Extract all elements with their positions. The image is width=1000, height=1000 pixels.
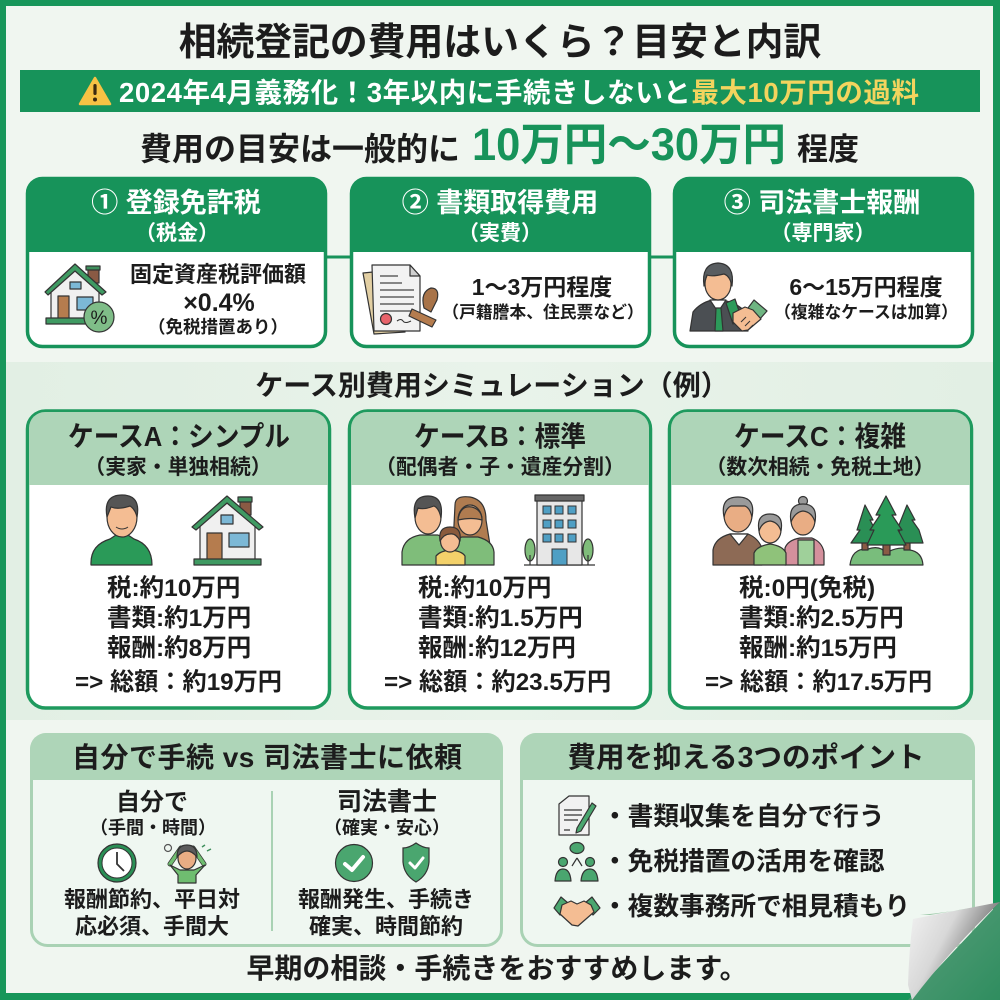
panel: case C	[670, 411, 972, 708]
panel: self vs scrivener	[30, 733, 503, 946]
cost estimate headline: 程度	[797, 132, 859, 167]
cost breakdown: 報酬:約15万円	[739, 634, 897, 662]
case subheading: （実家・単独相続）	[84, 456, 272, 479]
cost breakdown	[384, 574, 611, 696]
cost breakdown: 書類:約1万円	[107, 604, 251, 632]
card heading: ③ 司法書士報酬	[724, 188, 920, 218]
icon: house with percent: %	[91, 308, 108, 329]
tip text: ・複数事務所で相見積もり	[602, 892, 910, 921]
panel: case A	[28, 411, 330, 708]
section heading: case simulation: ケース別費用シミュレーション（例）	[255, 370, 729, 401]
column: scrivener: 確実、時間節約	[309, 914, 463, 939]
column: self: 自分で	[116, 789, 188, 816]
panel: case B	[350, 411, 650, 708]
icon: family house	[192, 496, 263, 565]
column: scrivener	[298, 788, 474, 939]
panel heading: 自分で手続 vs 司法書士に依頼	[72, 742, 462, 773]
panel: document fees	[350, 177, 651, 346]
case heading: ケースC：複雑	[734, 421, 906, 452]
icon: clock	[98, 844, 136, 882]
card heading: ② 書類取得費用	[402, 188, 598, 218]
fee text: （複雑なケースは加算）	[774, 302, 958, 322]
icon: check circle	[336, 844, 372, 882]
cost breakdown: 書類:約1.5万円	[418, 604, 583, 632]
column: scrivener: 司法書士	[337, 788, 437, 816]
fee text: （免税措置あり）	[148, 317, 288, 337]
column: self: 応必須、手間大	[75, 914, 229, 939]
case heading: ケースB：標準	[414, 421, 586, 452]
icon: family	[402, 496, 494, 565]
card heading: ① 登録免許税	[91, 188, 261, 218]
icon: forest land	[850, 496, 923, 565]
tip text: ・書類収集を自分で行う	[602, 802, 885, 831]
cost breakdown	[705, 574, 932, 696]
icon: professional handshake	[690, 263, 767, 331]
icon: single person	[91, 495, 152, 565]
divider	[271, 791, 273, 931]
card subheading: （税金）	[135, 222, 219, 245]
card subheading: （実費）	[458, 222, 542, 245]
icon: apartment building	[524, 495, 595, 565]
panel: three saving tips	[520, 733, 975, 946]
column: scrivener: 報酬発生、手続き	[298, 887, 474, 912]
icon: documents and stamp	[363, 265, 438, 334]
icon: handshake	[554, 897, 600, 926]
fee text	[774, 274, 958, 322]
icon: discussion group	[555, 842, 598, 881]
page curl	[908, 902, 1000, 1000]
cost breakdown: => 総額：約19万円	[75, 669, 282, 696]
column: self: （手間・時間）	[90, 818, 216, 838]
card subheading: （専門家）	[770, 222, 876, 245]
panel: scrivener fees	[673, 177, 974, 346]
icon: document and pen	[559, 796, 596, 835]
cost breakdown: => 総額：約17.5万円	[705, 669, 932, 696]
cost breakdown: 報酬:約12万円	[418, 634, 576, 662]
cost breakdown: 書類:約2.5万円	[739, 604, 904, 632]
column: self: 報酬節約、平日対	[64, 887, 240, 912]
cost breakdown: 税:約10万円	[107, 574, 240, 602]
fee text: （戸籍謄本、住民票など）	[442, 302, 644, 322]
connector lines between fee cards	[327, 256, 673, 258]
title: 相続登記の費用はいくら？目安と内訳	[179, 22, 821, 64]
banner text: 2024年4月義務化！3年以内に手続きしないと最大10万円の過料	[119, 77, 919, 108]
closing message: 早期の相談・手続きをおすすめします。	[246, 953, 748, 984]
fee text: 1〜3万円程度	[472, 274, 612, 300]
fee text: 固定資産税評価額	[130, 262, 306, 287]
icon: house with percent	[45, 264, 114, 332]
cost breakdown: 税:約10万円	[418, 574, 551, 602]
cost breakdown: 報酬:約8万円	[107, 634, 251, 662]
icon: shield check	[403, 843, 429, 882]
icon: worried person	[164, 844, 211, 883]
fee text: ×0.4%	[183, 289, 255, 317]
panel: registration tax	[26, 177, 327, 346]
tip text: ・免税措置の活用を確認	[602, 847, 885, 876]
fee text: 6〜15万円程度	[789, 274, 943, 300]
fee text	[130, 262, 306, 337]
case subheading: （配偶者・子・遺産分割）	[375, 456, 625, 479]
fee text	[442, 274, 644, 322]
cost breakdown: 税:0円(免税)	[739, 574, 875, 602]
column: scrivener: （確実・安心）	[324, 818, 450, 838]
icon: warning triangle	[80, 78, 110, 104]
panel heading: 費用を抑える3つのポイント	[568, 742, 924, 774]
column: self	[64, 789, 240, 939]
case subheading: （数次相続・免税土地）	[706, 456, 934, 479]
cost estimate headline: 10万円〜30万円	[472, 119, 786, 170]
icon: elderly family	[713, 496, 824, 565]
cost estimate headline: 費用の目安は一般的に	[140, 131, 460, 167]
case heading: ケースA：シンプル	[68, 421, 290, 452]
cost breakdown: => 総額：約23.5万円	[384, 669, 611, 696]
cost breakdown	[75, 574, 282, 696]
alert banner	[20, 70, 980, 112]
cost estimate headline	[140, 119, 859, 170]
